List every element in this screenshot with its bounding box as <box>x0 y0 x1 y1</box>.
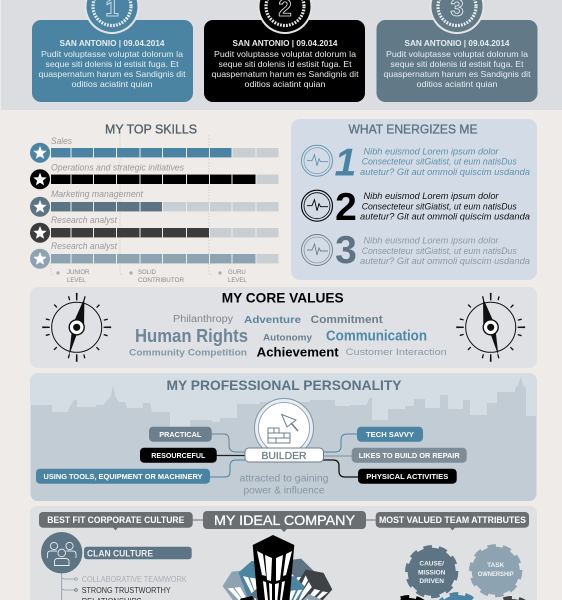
legend: skill levels: LEVEL <box>228 278 247 284</box>
panel: my top skills <box>30 122 278 284</box>
pill: physical activities: PHYSICAL ACTIVITIES <box>366 472 448 481</box>
item 2: Nibh euismod Lorem ipsum dolor <box>364 191 500 201</box>
word cloud: Community Competition <box>129 348 247 358</box>
text: event 2: Pudit voluptasse voluptat dolorum la <box>214 50 356 59</box>
item 3 <box>302 229 530 272</box>
pill: tech savvy <box>357 427 423 442</box>
bar: research analyst dark <box>30 215 278 243</box>
bar: operations <box>30 162 278 189</box>
label: clan culture: CLAN CULTURE <box>87 548 153 558</box>
word cloud: Philanthropy <box>173 314 233 325</box>
item 2: Consecteteur sitGiatist, ut eum natisDus <box>362 202 517 212</box>
text: event 3: Pudit voluptasse voluptat dolorum la <box>386 50 528 59</box>
pill: likes to build: LIKES TO BUILD OR REPAIR <box>359 451 460 460</box>
text: event 3: SAN ANTONIO | 09.04.2014 <box>404 39 510 48</box>
pill: physical activities <box>358 469 457 484</box>
item 1: Nibh euismod Lorem ipsum dolor <box>364 146 500 156</box>
bar: marketing: Marketing management <box>51 189 143 199</box>
heading: my professional personality: MY PROFESSIONAL PERSONALITY <box>166 377 402 393</box>
text: event 1: SAN ANTONIO | 09.04.2014 <box>60 39 165 48</box>
text: event 2: SAN ANTONIO | 09.04.2014 <box>232 39 338 48</box>
pill: tech savvy: TECH SAVVY <box>366 430 414 439</box>
heading: my ideal company <box>203 511 366 532</box>
icon: clan culture people <box>41 532 82 573</box>
text: attracted <box>240 474 328 496</box>
text: event 1: seque siti dolenis id estisit fuga. Et <box>46 60 179 69</box>
top band <box>1 0 562 110</box>
icon: gear task ownership <box>471 546 520 596</box>
item 3: Consecteteur sitGiatist, ut eum natisDus <box>362 246 517 256</box>
pill: practical: PRACTICAL <box>159 430 202 439</box>
item 3: Nibh euismod Lorem ipsum dolor <box>364 236 500 246</box>
bar: research analyst light <box>30 241 278 269</box>
item 1: 1 <box>335 142 356 185</box>
bar: operations: Operations and strategic initiatives <box>51 162 184 172</box>
pill: resourceful <box>140 448 217 463</box>
item 1: autetur? Git aut ommoli quiscim usdanda <box>360 167 530 177</box>
text: event 1 <box>38 39 186 89</box>
icon: badge 3 <box>430 0 484 34</box>
panel: event card 3 <box>376 0 538 102</box>
icon: gear blue <box>433 594 483 600</box>
icon: gear dark <box>486 598 537 600</box>
text: event 2: seque siti dolenis id estisit fuga. Et <box>218 60 352 69</box>
item 2: autetur? Git aut ommoli quiscim usdanda <box>360 212 530 222</box>
legend: skill levels <box>56 270 247 284</box>
item 3: 3 <box>335 229 357 272</box>
heading: my core values: MY CORE VALUES <box>222 290 344 306</box>
word cloud: Communication <box>326 328 427 344</box>
heading: best fit corporate culture: BEST FIT CORPORATE CULTURE <box>47 515 184 525</box>
icon: badge 2 <box>258 0 312 34</box>
word cloud: Customer Interaction <box>346 347 447 358</box>
icon: builder emblem <box>254 398 314 458</box>
text: event 1: quaspernatum harum es Sandignis dit <box>38 70 186 79</box>
word cloud: Adventure <box>244 314 301 326</box>
icon: gear task ownership: OWNERSHIP <box>478 571 514 578</box>
icon: gear black <box>384 597 434 600</box>
panel: what energizes me <box>291 119 537 280</box>
panel: event card 1 <box>32 0 193 102</box>
icon: right compass <box>460 297 521 358</box>
text: event 3: oditios aciatint quian <box>416 80 498 89</box>
icon: gear cause mission driven: CAUSE/ <box>419 560 444 568</box>
word cloud: Human Rights <box>135 326 248 346</box>
panel: my core values <box>30 287 537 368</box>
pill: using tools <box>36 469 210 484</box>
text: event 3: quaspernatum harum es Sandignis dit <box>384 70 531 79</box>
label: builder <box>245 448 324 462</box>
pill: using tools: USING TOOLS, EQUIPMENT OR MACHINERY <box>44 472 202 481</box>
icon: gear task ownership: TASK <box>487 562 505 569</box>
pill: resourceful: RESOURCEFUL <box>151 451 206 460</box>
text: attracted: power & influence <box>244 486 325 496</box>
text: event 1: oditios aciatint quian <box>72 80 153 89</box>
heading: my top skills: MY TOP SKILLS <box>105 122 197 136</box>
icon: gear cause mission driven: DRIVEN <box>419 578 444 585</box>
heading: most valued team attributes <box>376 512 529 530</box>
pill: practical <box>149 427 212 442</box>
bar: marketing <box>30 189 278 217</box>
text: event 2 <box>212 39 359 89</box>
legend: skill levels: SOLID <box>138 270 157 276</box>
list: culture traits <box>62 573 187 600</box>
bar: research analyst light: Research analyst <box>51 241 117 251</box>
skyline <box>31 376 536 501</box>
panel: my ideal company <box>30 506 537 600</box>
bar: research analyst dark: Research analyst <box>51 215 117 225</box>
bar: sales <box>30 136 278 163</box>
word cloud: Autonomy <box>263 332 313 344</box>
bar: sales: Sales <box>51 136 72 146</box>
heading: best fit corporate culture <box>39 512 193 530</box>
icon: left compass <box>46 297 107 358</box>
list: culture traits: COLLABORATIVE TEAMWORK <box>82 575 187 584</box>
icon: building fan <box>219 535 337 600</box>
text: attracted: attracted to gaining <box>240 474 328 484</box>
legend: skill levels: CONTRIBUTOR <box>138 278 185 284</box>
label: builder: BUILDER <box>262 451 306 462</box>
text: event 1: Pudit voluptasse voluptat dolorum la <box>41 50 183 59</box>
legend: skill levels: JUNIOR <box>67 270 90 276</box>
heading: my ideal company: MY IDEAL COMPANY <box>214 512 356 528</box>
text: event 3: seque siti dolenis id estisit fuga. Et <box>390 60 524 69</box>
connectors <box>210 434 358 477</box>
list: culture traits: STRONG TRUSTWORTHY <box>82 586 171 595</box>
pill: likes to build <box>352 448 467 463</box>
word cloud: Commitment <box>311 314 383 326</box>
item 3: autetur? Git aut ommoli quiscim usdanda <box>360 256 530 266</box>
word cloud <box>129 314 447 360</box>
panel: event card 2 <box>204 0 365 102</box>
item 1 <box>302 142 530 185</box>
word cloud: Achievement <box>257 344 339 360</box>
icon: gear cause mission driven <box>407 547 457 596</box>
heading: what energizes me: WHAT ENERGIZES ME <box>348 122 478 136</box>
text: event 3 <box>384 39 531 89</box>
legend: skill levels: GURU <box>228 270 246 276</box>
item 2: 2 <box>335 186 357 229</box>
heading: most valued team attributes: MOST VALUED TEAM ATTRIBUTES <box>379 515 526 525</box>
legend: skill levels: LEVEL <box>67 278 86 284</box>
text: event 2: quaspernatum harum es Sandignis dit <box>212 70 359 79</box>
text: event 2: oditios aciatint quian <box>244 80 326 89</box>
item 1: Consecteteur sitGiatist, ut eum natisDus <box>362 157 517 167</box>
icon: gear cause mission driven: MISSION <box>418 570 446 576</box>
panel: my professional personality <box>30 373 537 501</box>
label: clan culture <box>84 547 192 559</box>
item 2 <box>302 186 530 229</box>
icon: badge 1 <box>84 0 140 34</box>
